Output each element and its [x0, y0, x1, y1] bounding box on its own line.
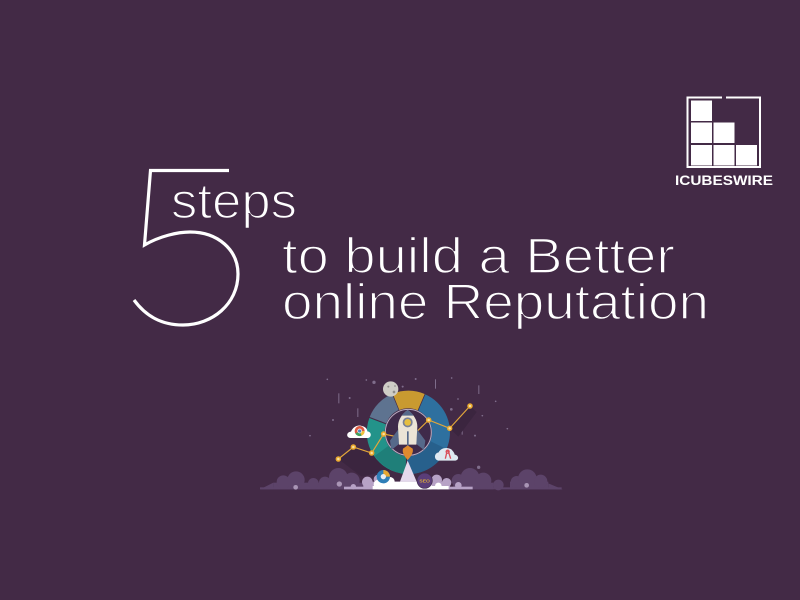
ground clouds: white layer: [373, 477, 449, 489]
illustration: rocket launch: [260, 377, 563, 490]
exhaust plume: [400, 461, 417, 482]
segment: dark blue shade: [407, 441, 447, 474]
ground clouds: back layer: [260, 468, 563, 490]
segment: blue: [407, 394, 450, 474]
big numeral 5: [134, 170, 238, 325]
ground clouds: mid layer: [344, 475, 473, 489]
cloud: browser icon: [347, 426, 371, 438]
chart shadow: [338, 406, 477, 477]
pie chart icon: [377, 470, 390, 483]
rocket fins: [390, 429, 425, 450]
chart nodes: [336, 404, 472, 461]
line chart: [336, 404, 472, 461]
rocket nose: [402, 410, 414, 416]
heading: online Reputation: online Reputation: [282, 274, 709, 330]
segment: slate: [370, 394, 399, 423]
cloud highlights: [293, 481, 529, 490]
rocket body: [398, 410, 417, 445]
donut chart: [367, 391, 450, 474]
rocket window: [403, 417, 413, 427]
segment: yellow: [393, 391, 425, 410]
heading: to build a Better: to build a Better: [282, 228, 675, 284]
chart line: [338, 406, 470, 459]
logo squares: [691, 100, 757, 166]
rocket: [390, 410, 425, 460]
heading: steps: steps: [171, 173, 297, 229]
logo wordmark: ICUBESWIRE: [675, 173, 773, 188]
segment: teal: [367, 418, 406, 474]
moon: [383, 381, 398, 397]
stars: [309, 377, 508, 469]
cloud: ribbon icon: [435, 448, 458, 461]
rocket flame: [403, 445, 413, 460]
title: [171, 173, 709, 330]
SEO badge: SEO: [419, 478, 430, 484]
rocket centre strut: [407, 431, 409, 449]
segment: dark teal shade: [375, 446, 406, 474]
logo frame: [688, 98, 760, 167]
logo: Icubeswire: [675, 98, 773, 188]
centre disc: [385, 409, 431, 455]
SEO badge: [417, 473, 432, 488]
